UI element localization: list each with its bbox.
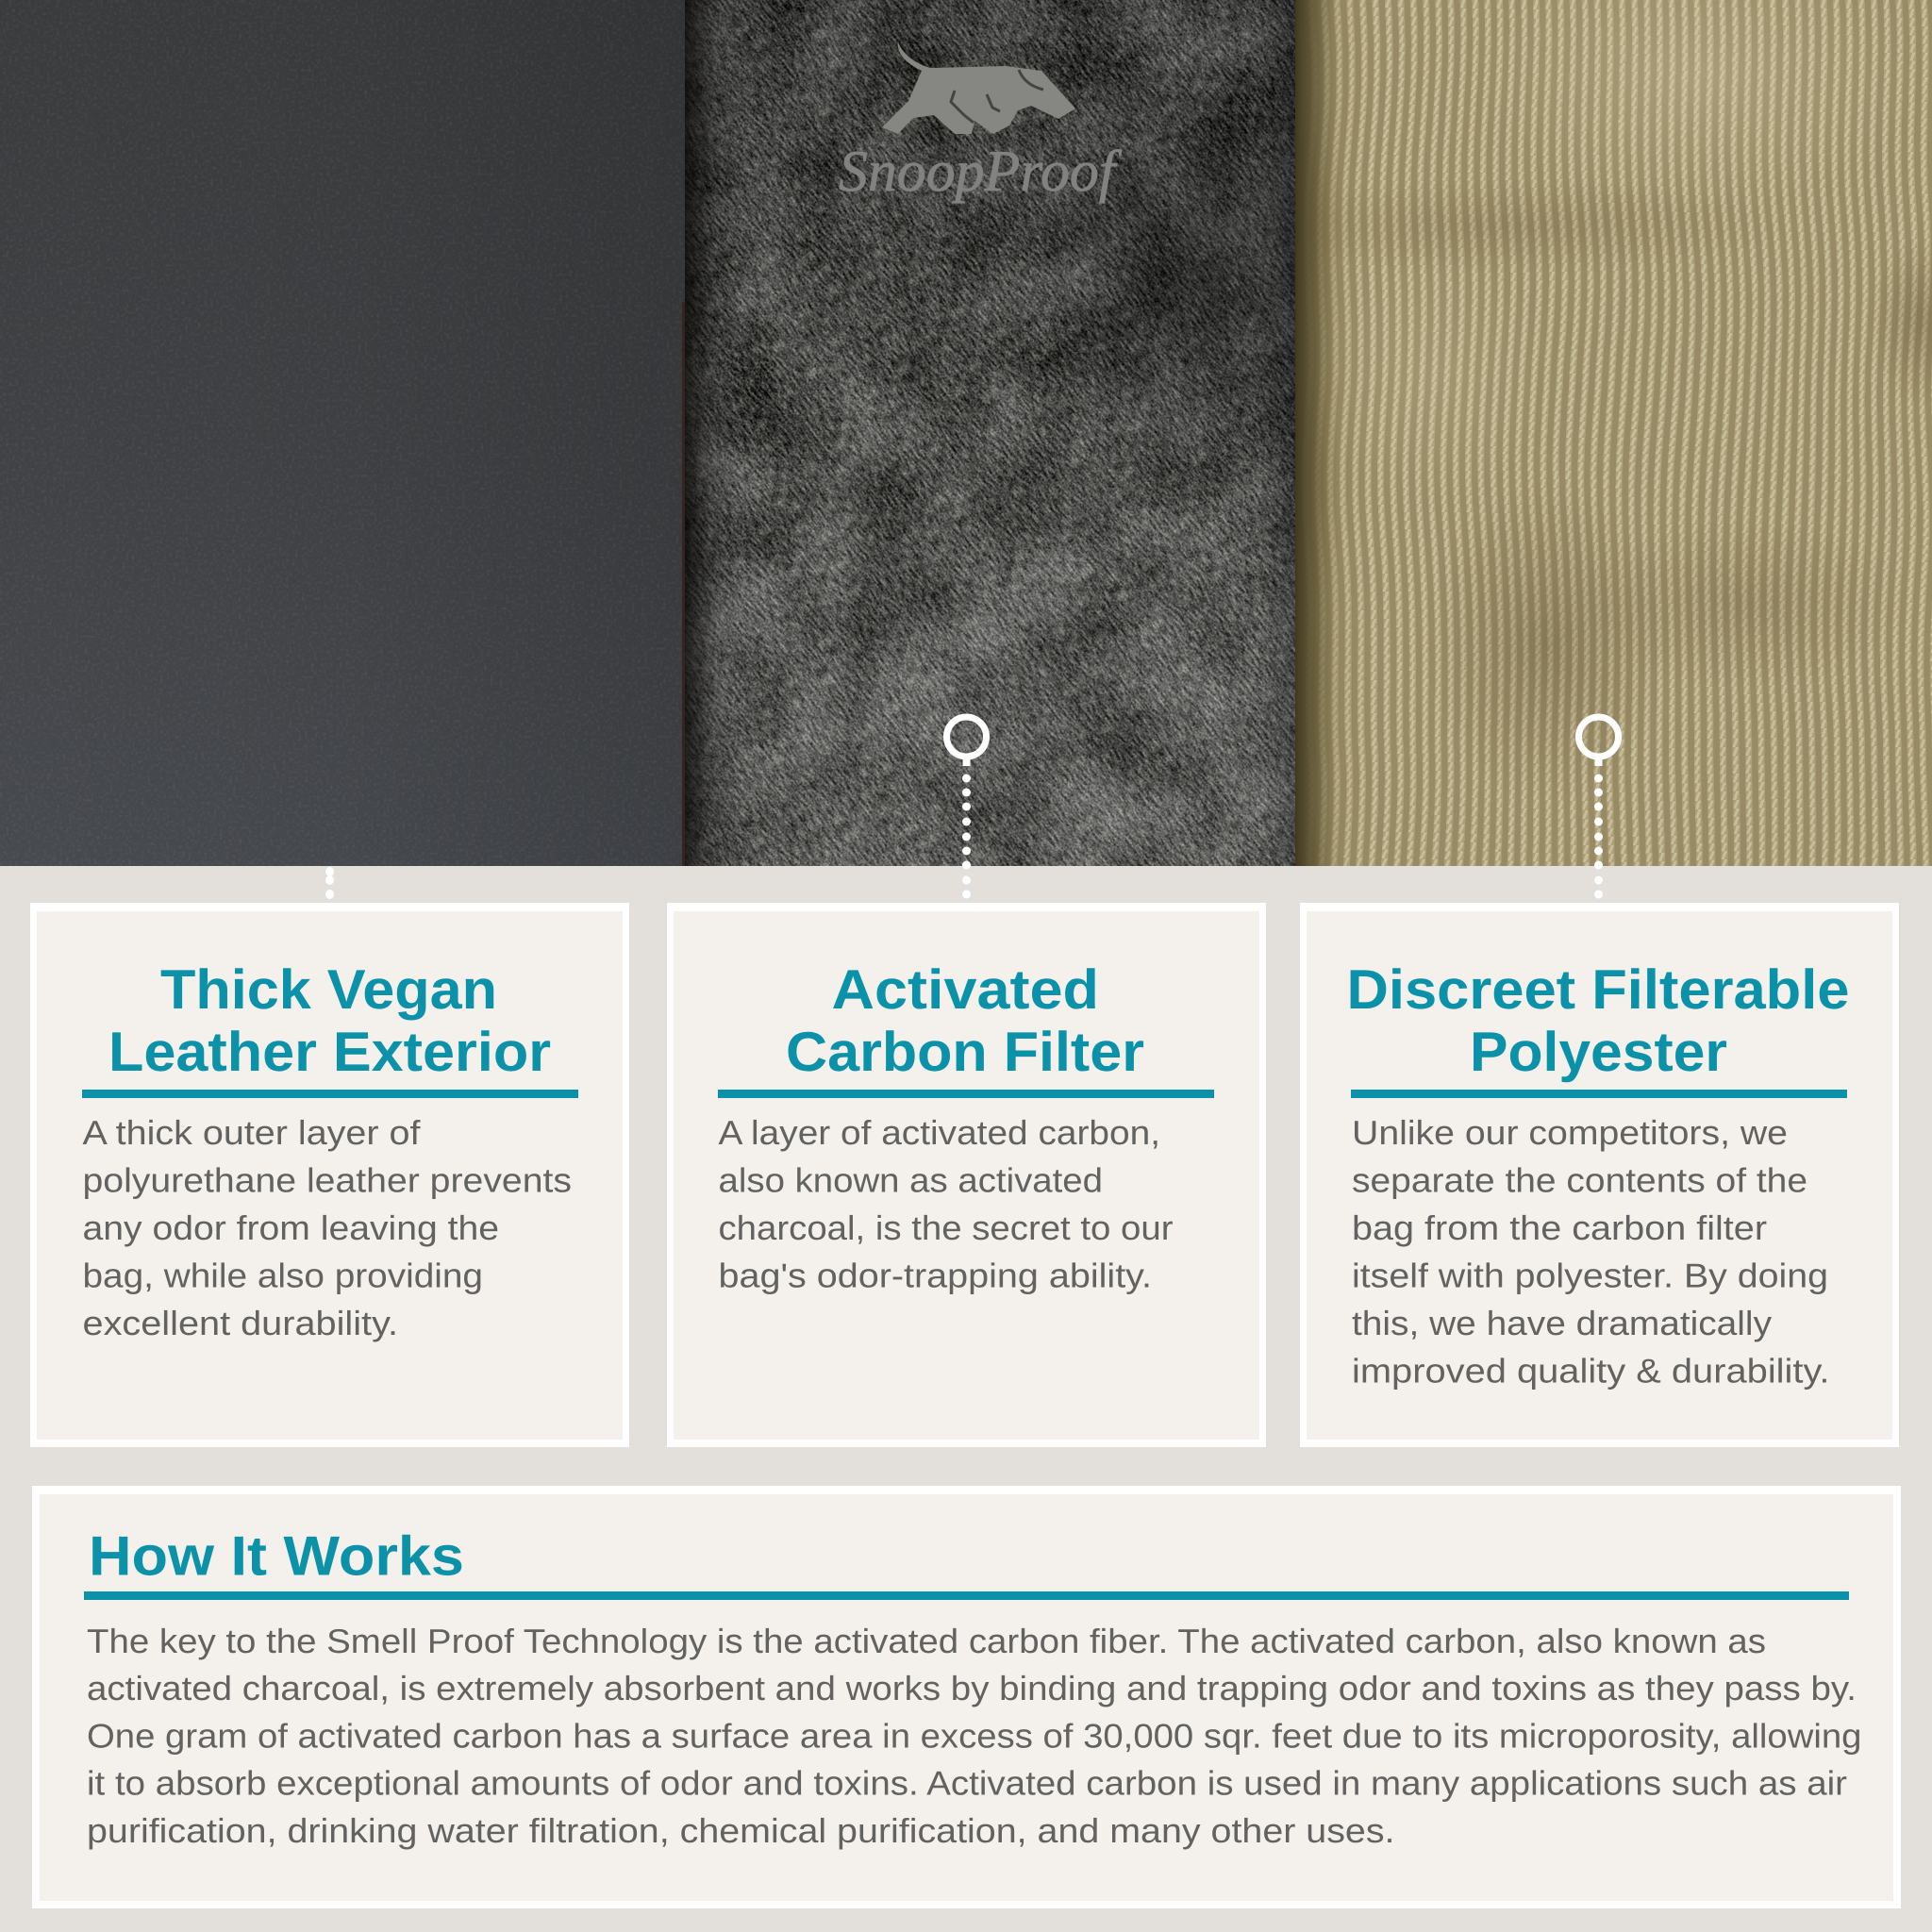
- body text: purification, drinking water filtration, chemical purification, and many other uses.: [87, 1811, 1394, 1850]
- body text: separate the contents of the: [1352, 1160, 1807, 1200]
- heading: Leather Exterior: [108, 1021, 551, 1083]
- heading rule: [1351, 1090, 1847, 1098]
- heading: [1347, 958, 1849, 1083]
- heading: [786, 958, 1144, 1083]
- body text: A layer of activated carbon,: [719, 1113, 1160, 1152]
- body text: bag's odor-trapping ability.: [719, 1257, 1152, 1294]
- heading rule: [84, 1591, 1849, 1600]
- panel: how it works: [32, 1486, 1901, 1908]
- body text: improved quality & durability.: [1352, 1351, 1830, 1391]
- body text: Unlike our competitors, we: [1352, 1113, 1788, 1152]
- body text: One gram of activated carbon has a surface area in excess of 30,000 sqr. feet due to its microporosity, allowing: [87, 1717, 1862, 1755]
- body text: [83, 1113, 572, 1342]
- body text: activated charcoal, is extremely absorbent and works by binding and trapping odor and toxins as they pass by.: [87, 1669, 1857, 1707]
- body text: polyurethane leather prevents: [83, 1160, 572, 1200]
- body text: [87, 1622, 1862, 1850]
- panel: thick vegan leather exterior: [30, 903, 629, 1447]
- body text: [719, 1113, 1174, 1294]
- callout marker: carbon ring and dotted connector: [947, 717, 987, 898]
- body text: it to absorb exceptional amounts of odor and toxins. Activated carbon is used in many applications such as air: [87, 1764, 1847, 1802]
- heading: Thick Vegan: [160, 958, 497, 1021]
- body text: bag, while also providing: [83, 1257, 483, 1294]
- heading: How It Works: [89, 1524, 464, 1587]
- body text: this, we have dramatically: [1352, 1304, 1772, 1342]
- icon: dog silhouette: [882, 42, 1075, 134]
- photo: polyester weave swatch: [1295, 0, 1932, 866]
- heading: Activated: [832, 958, 1099, 1021]
- heading rule: [718, 1090, 1214, 1098]
- body text: itself with polyester. By doing: [1352, 1257, 1828, 1294]
- callout marker: polyester ring and dotted connector: [1579, 717, 1619, 898]
- body text: The key to the Smell Proof Technology is the activated carbon fiber. The activated carbon, also known as: [87, 1622, 1766, 1660]
- heading: [108, 958, 551, 1083]
- callout marker: leather connector dots: [325, 867, 334, 899]
- body text: charcoal, is the secret to our: [719, 1208, 1174, 1247]
- body text: A thick outer layer of: [83, 1113, 422, 1152]
- wordmark: SnoopProof: [839, 140, 1123, 204]
- heading rule: [82, 1090, 578, 1098]
- logo: SnoopProof dog and wordmark: [839, 42, 1123, 204]
- heading: Polyester: [1470, 1021, 1727, 1083]
- body text: [1352, 1113, 1830, 1391]
- heading: Carbon Filter: [786, 1021, 1144, 1083]
- heading: Discreet Filterable: [1347, 958, 1849, 1021]
- body text: bag from the carbon filter: [1352, 1208, 1767, 1247]
- body text: excellent durability.: [83, 1304, 398, 1342]
- photo: vegan leather swatch: [0, 0, 685, 866]
- photo: activated carbon felt swatch: [685, 0, 1295, 866]
- body text: also known as activated: [719, 1160, 1103, 1200]
- panel: activated carbon filter: [667, 903, 1266, 1447]
- body text: any odor from leaving the: [83, 1208, 499, 1247]
- panel: discreet filterable polyester: [1300, 903, 1899, 1447]
